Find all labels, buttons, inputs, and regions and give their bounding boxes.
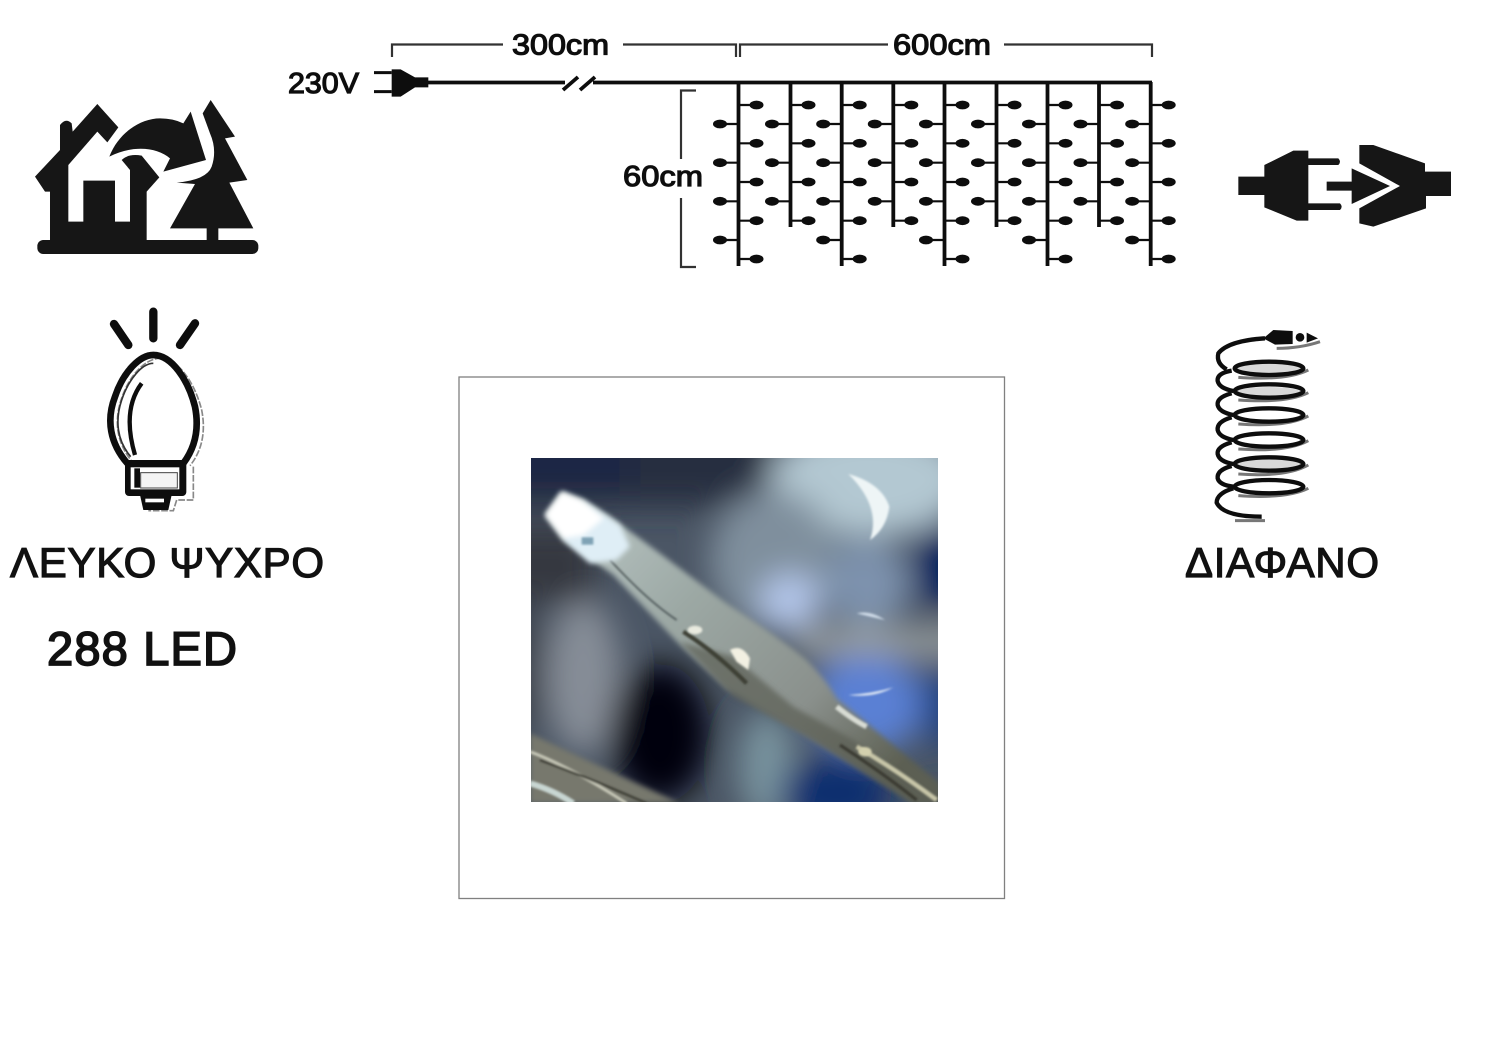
bulb shadow: [117, 358, 203, 511]
dimension: lead length: 300cm: [512, 30, 609, 62]
dimension: curtain drop: [623, 90, 703, 267]
dimension: curtain width: [740, 30, 1152, 62]
cable break mark: [563, 77, 595, 90]
lead cable: [425, 81, 1152, 84]
cable plug: [1263, 330, 1293, 345]
icon: LED bulb: [110, 312, 203, 511]
dimension: lead length: [392, 30, 736, 62]
bulb glass: [110, 355, 197, 463]
label: voltage: 230V: [288, 68, 360, 100]
glass highlight: [130, 383, 142, 455]
wiring diagram: [288, 30, 1176, 267]
photo background: [530, 457, 940, 803]
lower cable tone: [682, 640, 892, 791]
dimension: curtain width: 600cm: [893, 30, 991, 62]
dimension: curtain drop: 60cm: [623, 161, 703, 193]
foreground cable: [530, 733, 680, 803]
icon part: male plug: [1238, 151, 1342, 221]
label: LED count: 288 LED: [47, 622, 237, 675]
bulb base: [125, 460, 186, 496]
coil fill: [1237, 364, 1300, 469]
icon part: arrow: [109, 112, 206, 172]
label: cable colour: ΔΙΑΦΑΝΟ: [1185, 539, 1379, 586]
LED body: [545, 492, 940, 803]
photo frame: [459, 377, 1004, 898]
icon part: tree: [170, 100, 253, 242]
coil windings: [1217, 338, 1303, 517]
icon: indoor and outdoor use: [35, 100, 258, 254]
icon part: arrow: [1327, 168, 1390, 204]
photo: LED close-up: [531, 458, 938, 802]
solder highlights: [688, 626, 872, 756]
icon part: female socket: [1359, 145, 1451, 227]
bulb tip: [140, 495, 172, 510]
icon: coiled transparent cable: [1217, 330, 1320, 521]
LED tip detail: [582, 537, 593, 545]
icon: connectable plugs: [1238, 145, 1451, 227]
light rays: [114, 312, 195, 345]
glass inner line: [118, 363, 153, 457]
background highlights: [848, 474, 893, 696]
LED tip glow: [545, 492, 630, 563]
icon: mains plug: [374, 69, 428, 97]
icon part: house: [35, 104, 159, 242]
cable strands: [610, 560, 937, 800]
LED strands: [713, 82, 1176, 266]
icon part: ground bar: [37, 240, 258, 254]
coil shadow: [1235, 342, 1320, 521]
label: colour: ΛΕΥΚΟ ΨΥΧΡΟ: [10, 539, 324, 586]
